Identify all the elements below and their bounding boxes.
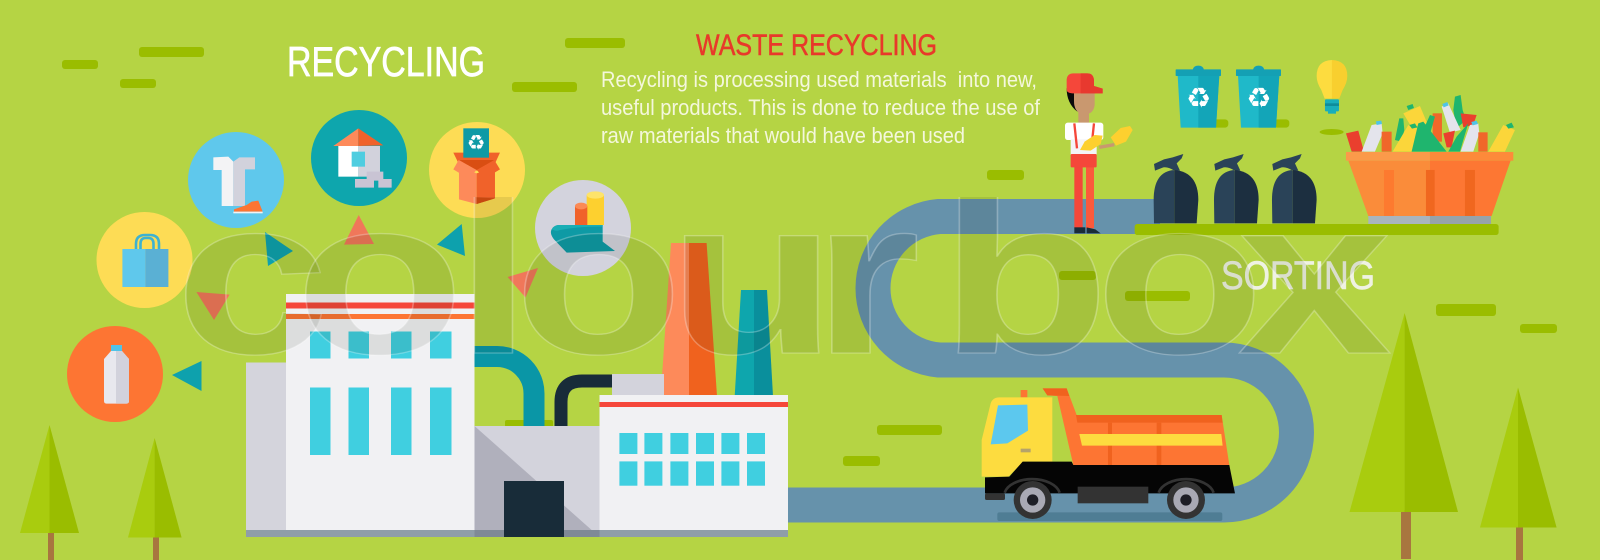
heading: recycling: RECYCLING: [287, 38, 485, 85]
description text: raw materials that would have been used: [601, 123, 965, 148]
recycling bin 2: ♻: [1246, 81, 1272, 114]
watermark: colourbox: [175, 153, 1392, 401]
chimneys: [661, 243, 773, 396]
pipes: [474, 356, 612, 427]
base strip: [246, 530, 788, 537]
circle: clothes: [188, 132, 284, 228]
light bulb: [1317, 60, 1347, 135]
heading: sorting: SORTING: [1221, 254, 1375, 298]
factory: [246, 243, 788, 537]
recycling bin 1: [1176, 66, 1228, 128]
truck chassis: [985, 462, 1235, 503]
dump truck: [982, 388, 1235, 521]
truck wheels: [1014, 481, 1205, 519]
circle: bag: [96, 212, 192, 308]
tree right small: [1480, 388, 1557, 560]
description text: Recycling is processing used materials into new,: [601, 67, 1037, 92]
main building: [246, 294, 474, 537]
truck cab: [982, 397, 1052, 477]
worker body: [1065, 112, 1114, 167]
description text: useful products. This is done to reduce the use of: [601, 95, 1041, 120]
right building: [600, 395, 788, 537]
circle: house: [311, 110, 407, 206]
worker legs: [1074, 165, 1101, 233]
tree left 1: [20, 425, 79, 560]
truck tipper: [1021, 388, 1229, 465]
heading: waste recycling: WASTE RECYCLING: [696, 29, 937, 62]
pile of bottles: [1346, 95, 1515, 152]
arrows between circles: [172, 215, 538, 391]
tree right large: [1350, 313, 1458, 559]
winding road: [780, 216, 1296, 505]
orange container: [1346, 152, 1513, 224]
circle: recycled box: ♻: [467, 130, 485, 154]
connector hall: [474, 426, 600, 537]
description text: [601, 67, 1041, 148]
worker: [1065, 73, 1133, 233]
recycling bin 2: [1236, 66, 1289, 128]
tree left 2: [128, 438, 182, 560]
circle: recycled box: [429, 122, 525, 218]
recycling bin 1: ♻: [1186, 81, 1211, 114]
circle: bottle: [67, 326, 163, 422]
worker head: [1067, 73, 1103, 114]
worker gloves: [1080, 126, 1133, 151]
circle: raw materials: [535, 180, 631, 276]
trash bags: [1154, 154, 1317, 223]
sorting platform and items: [1065, 60, 1515, 235]
